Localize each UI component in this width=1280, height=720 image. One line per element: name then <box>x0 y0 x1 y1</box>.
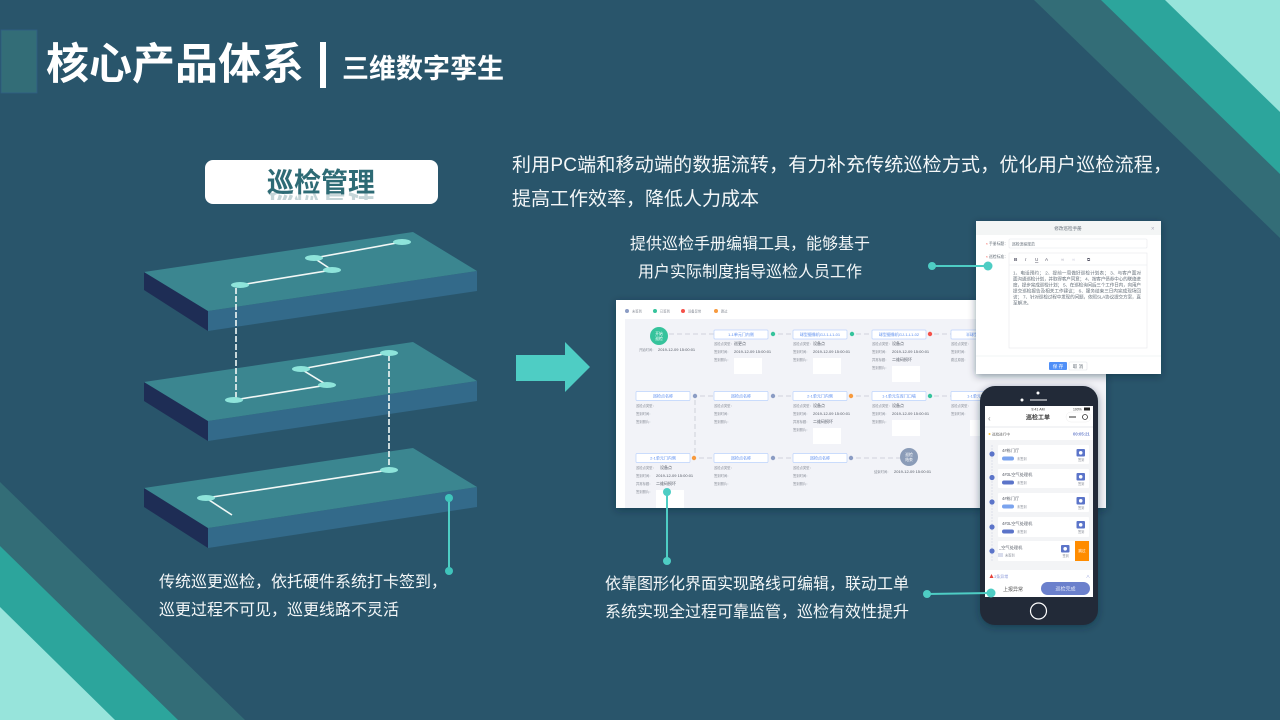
flow row 1: 2019-12-09 15:00:01 <box>658 347 696 352</box>
flow row 1: 巡检 <box>655 336 663 341</box>
task cards: 未签到 <box>1005 552 1015 558</box>
phone mockup: ‹ <box>988 414 991 423</box>
screenshot: manual edit dialog: 巡检标准： <box>989 254 1008 259</box>
flow row 3: 签到时间： <box>714 473 730 478</box>
flow row 2: 异常标题： <box>793 419 809 424</box>
task cards: 未签到 <box>1017 504 1027 509</box>
flow row 1: 巡检点类型： <box>951 341 971 346</box>
callout: manual editor <box>630 235 870 281</box>
flow row 3 <box>636 448 932 508</box>
flow row 3: 签到照片： <box>714 481 730 486</box>
task cards: _空气处理机 <box>998 544 1023 551</box>
flow row 3: 结束 <box>905 457 913 462</box>
intro text <box>512 154 1172 210</box>
legend: 已签到 <box>660 308 670 314</box>
caption: graphical interface: 系统实现全过程可靠监管，巡检有效性提升 <box>605 603 909 621</box>
decoration: top right stripes <box>1034 0 1280 238</box>
legend: 未签到 <box>632 308 642 314</box>
flow row 2: 2019-12-09 15:00:01 <box>813 411 851 416</box>
phone bottom bar <box>985 570 1093 597</box>
task cards: 4#栋门厅 <box>1002 495 1019 502</box>
title accent block <box>1 30 37 93</box>
flow row 1: 2019-12-09 15:00:01 <box>892 349 930 354</box>
flow row 2: 2019-12-09 15:00:01 <box>892 411 930 416</box>
flow row 1: 开始时间： <box>639 347 655 352</box>
flow row 2: 1-1单元车库门口墙 <box>882 392 916 398</box>
screenshot: manual edit dialog: 修改巡检手册 <box>1054 225 1082 232</box>
flow row 3: 巡检点类型： <box>714 465 734 470</box>
screenshot: manual edit dialog: I <box>1025 257 1027 262</box>
flow row 2: 设备点 <box>813 402 825 408</box>
flow row 1: 开始 <box>655 331 663 336</box>
flow row 2 <box>636 392 1005 444</box>
flow row 2: 设备点 <box>892 402 904 408</box>
flow row 1 <box>639 327 1005 382</box>
flow row 1: 巡检点类型： <box>714 341 734 346</box>
flow row 3: 巡检点类型： <box>793 465 813 470</box>
flow row 2: 二维码损坏 <box>813 418 833 424</box>
task cards: 签到 <box>1078 505 1084 510</box>
flow row 3: 巡检点名称 <box>810 454 830 460</box>
callout: manual editor: 用户实际制度指导巡检人员工作 <box>638 263 862 281</box>
intro text: 利用PC端和移动端的数据流转，有力补充传统巡检方式，优化用户巡检流程， <box>512 154 1172 176</box>
route nodes <box>197 239 411 501</box>
flow row 2: 巡检点类型： <box>872 403 892 408</box>
flow row 1: 签到时间： <box>793 349 809 354</box>
task cards: 未签到 <box>1017 456 1027 461</box>
dialog body text: 1、电话预约； 2、提前一周做好巡检计划表； 3、与客户面对 <box>1013 270 1141 276</box>
flow row 1: 巡检点类型： <box>793 341 813 346</box>
flow row 3: 巡检点类型： <box>636 465 656 470</box>
screenshot: manual edit dialog: 保 存 <box>1053 363 1064 370</box>
flow row 3: 巡检 <box>905 452 913 457</box>
screenshot: manual edit dialog: × <box>1151 226 1155 232</box>
task cards: 4#3L空气处理机 <box>1002 520 1033 527</box>
flow row 2: 巡检点类型： <box>793 403 813 408</box>
screenshot: manual edit dialog: * <box>986 255 988 260</box>
screenshot: PC route flow <box>616 300 1106 508</box>
dialog body text: 至解决。 <box>1013 300 1031 306</box>
flow row 1: 签到照片： <box>872 365 888 370</box>
pointer: dialog to callout <box>928 262 992 270</box>
flow row 3: 巡检点名称 <box>731 454 751 460</box>
task cards <box>989 445 1089 561</box>
pointer: screenshot to caption <box>663 488 671 565</box>
legend: 设备异常 <box>688 308 702 314</box>
phone mockup: 巡检工单 <box>1026 414 1050 422</box>
caption: traditional patrol: 传统巡更巡检，依托硬件系统打卡签到， <box>159 573 447 591</box>
flow row 3: 二维码损坏 <box>656 480 676 486</box>
isometric floors diagram <box>144 232 477 548</box>
flow row 2: 签到时间： <box>636 411 652 416</box>
flow row 1: 球型摄像机GJ-1-L1-01 <box>800 331 841 337</box>
flow row 2: 2-1单元门内侧 <box>807 392 833 398</box>
phone mockup: 100% <box>1073 408 1082 412</box>
title: 三维数字孪生 <box>342 54 504 84</box>
flow row 3: 结束时间： <box>874 469 890 474</box>
flow row 1: 签到照片： <box>714 357 730 362</box>
flow connectors <box>669 334 951 458</box>
screenshot: manual edit dialog: B <box>1014 257 1018 262</box>
dialog body text: 面沟通巡检计划，并取得客户同意； 4、按客户债券中心的联络进 <box>1013 276 1141 282</box>
flow row 1: 2019-12-09 15:00:01 <box>734 349 772 354</box>
flow row 1: 二维码损坏 <box>892 356 912 362</box>
caption: traditional patrol <box>159 573 447 619</box>
flow row 2: 签到照片： <box>714 419 730 424</box>
dialog body text: 提交巡检报告及相关工作建议； 6、服务结束三日内完成现场回 <box>1013 288 1141 294</box>
dialog body text <box>1013 270 1141 306</box>
floor 3 platform <box>144 448 477 548</box>
flow row 2: 签到时间： <box>951 411 967 416</box>
dialog body text: 访； 7、针对巡检过程中发现的问题，依照SLA协议提交方案，直 <box>1013 294 1141 300</box>
flow row 1: 跳过原因： <box>951 357 967 362</box>
pointer: floors to caption <box>445 494 453 575</box>
flow row 2: 签到时间： <box>872 411 888 416</box>
flow row 3: 签到时间： <box>636 473 652 478</box>
flow row 1: 2019-12-09 15:00:01 <box>813 349 851 354</box>
flow row 3: 2-1单元门内侧 <box>650 454 676 460</box>
flow row 3: 2019-12-09 15:00:01 <box>656 473 694 478</box>
patrol route lines <box>206 242 402 515</box>
caption: graphical interface <box>605 575 909 621</box>
screenshot: manual edit dialog: ∞ <box>1061 257 1064 262</box>
task cards: 4#3L空气处理机 <box>1002 471 1033 478</box>
legend <box>625 308 728 314</box>
decoration: bottom left stripes <box>0 482 245 720</box>
flow row 1: 签到时间： <box>714 349 730 354</box>
flow row 2: 巡检点名称 <box>653 392 673 398</box>
phone bottom bar: ∧ <box>1086 574 1090 579</box>
phone bottom bar: 3条异常 <box>994 573 1008 579</box>
flow row 1: 签到时间： <box>872 349 888 354</box>
progress strip: 00:05:21 <box>1073 432 1090 436</box>
task cards: 未签到 <box>1017 529 1027 534</box>
flow row 3: 签到时间： <box>793 473 809 478</box>
heading card: inspection management: 巡检管理 <box>267 186 375 216</box>
arrow <box>516 342 590 392</box>
screenshot: manual edit dialog <box>976 221 1161 374</box>
flow row 1: 签到时间： <box>951 349 967 354</box>
progress strip: 巡检进行中 <box>992 432 1010 436</box>
floor 2 platform <box>144 342 477 441</box>
task cards: 签到 <box>1062 553 1069 558</box>
flow row 2: 巡检点类型： <box>636 403 656 408</box>
flow row 1: 巡检点类型： <box>872 341 892 346</box>
screenshot: manual edit dialog: A <box>1045 257 1049 262</box>
flow row 1: 签到照片： <box>793 357 809 362</box>
flow row 3: 2019-12-09 15:00:01 <box>894 469 932 474</box>
flow row 1: 巡更点 <box>734 340 746 346</box>
flow row 2: 1-1单元车库 <box>967 392 989 398</box>
task cards: 签到 <box>1078 457 1084 462</box>
phone mockup <box>980 386 1098 625</box>
home button <box>1030 603 1046 619</box>
flow row 1: 半球型摄像机 <box>966 331 990 337</box>
flow row 3: 设备点 <box>660 464 672 470</box>
floor 1 platform <box>144 232 477 331</box>
flow row 2: 巡检点名称 <box>731 392 751 398</box>
task cards: 签到 <box>1078 481 1084 486</box>
flow row 2: 签到时间： <box>793 411 809 416</box>
task cards: 跳过 <box>1078 548 1086 553</box>
screenshot: manual edit dialog: * <box>986 242 988 247</box>
phone bottom bar: 上报异常 <box>1003 586 1023 593</box>
flow row 3: 签到照片： <box>793 481 809 486</box>
flow row 2: 巡检点类型： <box>714 403 734 408</box>
caption: traditional patrol: 巡更过程不可见，巡更线路不灵活 <box>159 601 399 619</box>
intro text: 提高工作效率，降低人力成本 <box>512 188 759 210</box>
screenshot: manual edit dialog: 手册标题： <box>989 241 1008 246</box>
phone bottom bar: 巡检完成 <box>1055 586 1076 592</box>
screenshot: manual edit dialog: ∞ <box>1072 257 1075 262</box>
task cards: 4#栋门厅 <box>1002 447 1019 454</box>
heading card: inspection management <box>205 160 438 204</box>
flow row 1: 1-1单元门内侧 <box>728 331 754 337</box>
flow row 2: 签到照片： <box>636 419 652 424</box>
flow row 2: 签到照片： <box>793 427 809 432</box>
dialog body text: 度，提步完成巡检计划； 5、在巡检询问后三个工作日内，向用户 <box>1013 282 1141 288</box>
flow row 1: 设备点 <box>813 340 825 346</box>
heading card: inspection management: 巡检管理 <box>267 168 375 198</box>
flow row 2: 巡检点类型： <box>951 403 971 408</box>
pointer: phone to caption <box>923 588 996 598</box>
caption: graphical interface: 依靠图形化界面实现路线可编辑，联动工单 <box>605 575 909 593</box>
task cards: 未签到 <box>1017 480 1027 485</box>
screenshot: manual edit dialog: ⧉ <box>1087 257 1091 262</box>
screenshot: manual edit dialog: 取 消 <box>1073 363 1084 370</box>
title <box>46 41 504 89</box>
progress strip <box>985 428 1093 440</box>
flow row 1: 异常标题： <box>872 357 888 362</box>
flow row 3: 异常标题： <box>636 481 652 486</box>
flow row 1: 球型摄像机GJ-1-L1-02 <box>879 331 920 337</box>
flow row 2: 签到照片： <box>872 419 888 424</box>
flow row 3: 签到照片： <box>636 489 652 494</box>
phone mockup: 9:41 AM <box>1031 408 1045 412</box>
flow row 1: 设备点 <box>892 340 904 346</box>
screenshot: manual edit dialog: U <box>1035 257 1038 262</box>
phone screen <box>985 406 1093 597</box>
flow row 2: 签到时间： <box>714 411 730 416</box>
legend: 跳过 <box>721 308 728 314</box>
task cards: 签到 <box>1078 529 1084 534</box>
callout: manual editor: 提供巡检手册编辑工具，能够基于 <box>630 235 870 253</box>
title: 核心产品体系 <box>46 41 304 89</box>
screenshot: manual edit dialog: 巡检流程规范 <box>1012 242 1035 246</box>
